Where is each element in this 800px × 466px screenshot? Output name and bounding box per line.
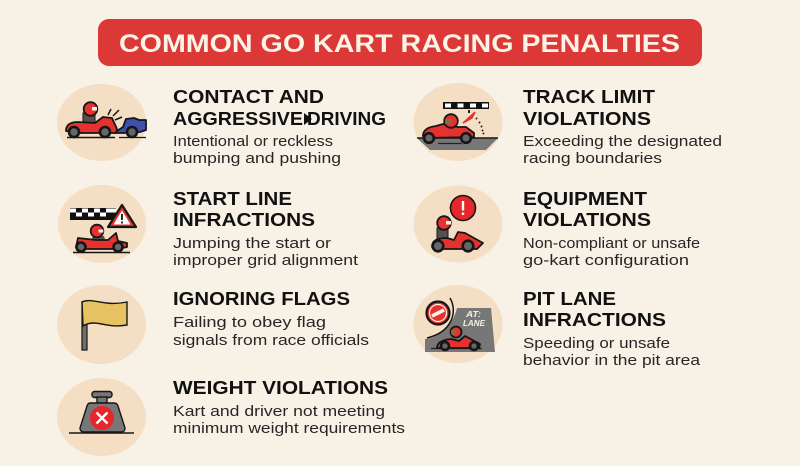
- text: contact description: Intentional or reckless: [173, 133, 333, 150]
- text: flags description: Failing to obey flag: [173, 314, 326, 331]
- panel: ignoring flags: [57, 285, 369, 364]
- text: equipment description: [523, 235, 700, 269]
- text: track limit description: Exceeding the designated: [523, 133, 722, 150]
- heading: pit lane infractions: [523, 289, 666, 330]
- icon: kart on track edge: [414, 83, 502, 161]
- icon: yellow flag: [57, 285, 146, 364]
- text: contact description: bumping and pushing: [173, 150, 341, 167]
- heading: contact and aggressive driving: CONTACT AND: [173, 87, 324, 107]
- heading: pit lane infractions: PIT LANE: [523, 289, 616, 309]
- heading: track limit violations: [523, 87, 655, 129]
- panel: start line infractions: [58, 185, 359, 269]
- heading: start line infractions: START LINE: [173, 189, 292, 209]
- icon: two karts colliding: [57, 84, 146, 161]
- heading: contact and aggressive driving: AGGRESSIVE: [173, 109, 303, 129]
- icon: weight with red cross: [57, 378, 146, 456]
- text: equipment description: go-kart configuration: [523, 252, 689, 269]
- text: weight description: minimum weight requirements: [173, 420, 405, 437]
- heading: equipment violations: [523, 189, 651, 230]
- icon: checkered start line and warning: [58, 185, 146, 263]
- panel: equipment violations: [414, 186, 700, 269]
- panel: pit lane infractions: [414, 285, 701, 369]
- panel: contact and aggressive driving: [57, 84, 386, 167]
- title: [98, 19, 702, 66]
- text: track limit description: racing boundaries: [523, 150, 662, 167]
- text: flags description: [173, 314, 369, 349]
- text: start line description: Jumping the start or: [173, 235, 331, 252]
- heading: track limit violations: VIOLATIONS: [523, 109, 651, 129]
- heading: start line infractions: INFRACTIONS: [173, 210, 315, 230]
- text: contact description: [173, 133, 341, 167]
- heading: start line infractions: [173, 189, 315, 230]
- text: track limit description: [523, 133, 722, 167]
- heading: equipment violations: EQUIPMENT: [523, 189, 647, 209]
- panel: weight violations: [57, 378, 405, 456]
- heading: contact and aggressive driving: [173, 87, 386, 129]
- text: start line description: improper grid alignment: [173, 252, 359, 269]
- icon: kart in pit lane: [414, 285, 502, 363]
- icon: kart with alert bubble: [414, 186, 502, 262]
- heading: pit lane infractions: INFRACTIONS: [523, 310, 666, 330]
- heading: contact and aggressive driving: DRIVING: [307, 109, 386, 129]
- text: weight description: Kart and driver not meeting: [173, 403, 385, 420]
- heading: equipment violations: VIOLATIONS: [523, 210, 651, 230]
- text: pit lane description: behavior in the pit area: [523, 352, 701, 369]
- icon: kart in pit lane: LANE: [463, 318, 485, 328]
- text: flags description: signals from race officials: [173, 332, 369, 349]
- heading: track limit violations: TRACK LIMIT: [523, 87, 655, 107]
- text: start line description: [173, 235, 359, 269]
- text: pit lane description: [523, 335, 701, 369]
- panel: track limit violations: [414, 83, 722, 167]
- heading: weight violations: WEIGHT VIOLATIONS: [173, 378, 388, 398]
- heading: ignoring flags: IGNORING FLAGS: [173, 289, 350, 309]
- text: equipment description: Non-compliant or unsafe: [523, 235, 700, 252]
- title: COMMON GO KART RACING PENALTIES: [119, 30, 680, 58]
- text: pit lane description: Speeding or unsafe: [523, 335, 670, 352]
- icon: kart in pit lane: AT:: [465, 309, 481, 319]
- text: weight description: [173, 403, 405, 437]
